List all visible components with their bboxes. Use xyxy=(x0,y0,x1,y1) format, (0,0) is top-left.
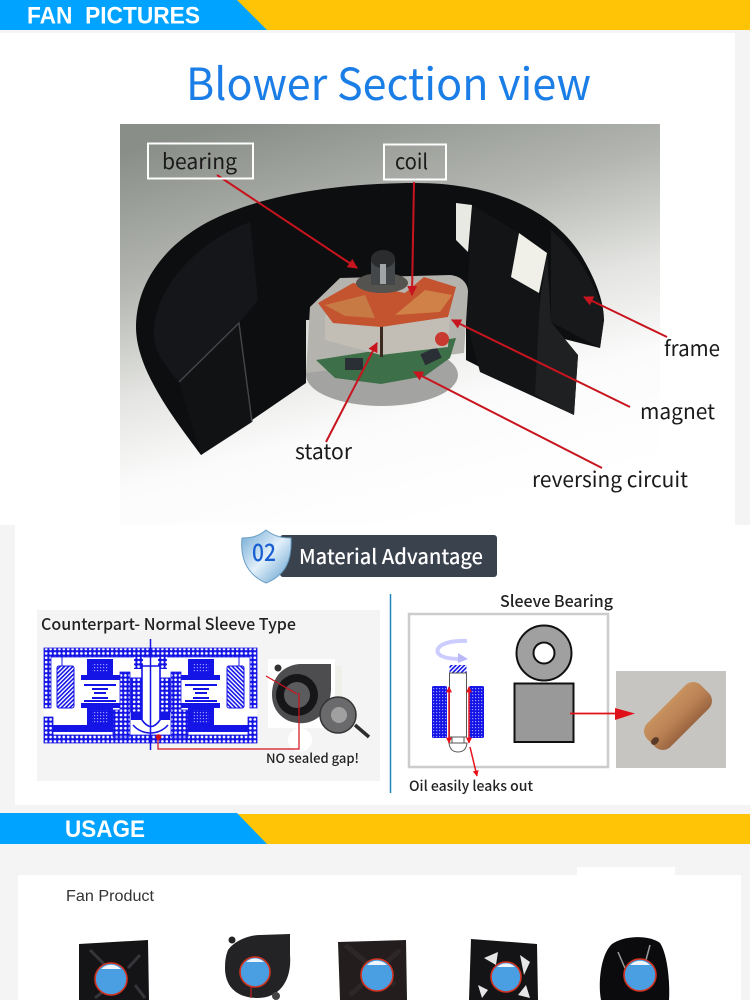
header band: fan pictures: FAN PICTURES xyxy=(27,2,200,30)
title: Blower Section view xyxy=(186,49,591,113)
product: blower xyxy=(225,934,290,1000)
oil arrows xyxy=(449,687,477,776)
schematic: blue cross-section xyxy=(44,639,257,750)
fan frame xyxy=(136,183,604,455)
label: coil: coil xyxy=(395,146,428,176)
label: bearing xyxy=(148,144,253,178)
icon: shield xyxy=(242,530,291,583)
header band: usage xyxy=(0,813,750,844)
panel: fan product xyxy=(18,867,741,1000)
divider xyxy=(390,594,392,793)
heading: Sleeve Bearing xyxy=(500,588,613,612)
shaft xyxy=(449,665,467,752)
heading: Fan Product xyxy=(66,888,155,905)
header band: fan pictures xyxy=(0,0,750,30)
arrow to photo xyxy=(570,708,635,720)
heading: Counterpart- Normal Sleeve Type xyxy=(41,611,296,635)
panel: material advantage xyxy=(15,525,750,805)
label: bearing: bearing xyxy=(162,146,237,176)
label: frame: frame xyxy=(664,333,720,363)
bearing blocks xyxy=(432,686,447,738)
callout text: NO sealed gap! xyxy=(266,748,359,767)
caption: Oil easily leaks out xyxy=(409,776,533,796)
header band: usage: USAGE xyxy=(65,816,145,843)
red pointer arrows xyxy=(217,175,667,468)
label: magnet: magnet xyxy=(640,396,715,426)
badge heading xyxy=(242,530,497,583)
label: coil xyxy=(384,144,446,180)
label: reversing circuit: reversing circuit xyxy=(532,464,688,494)
motor hub xyxy=(306,250,468,406)
panel: blower section view xyxy=(0,33,735,525)
product: round fan xyxy=(600,937,669,1000)
photo: copper sleeve xyxy=(616,671,726,768)
diagram box xyxy=(409,614,608,776)
product: square fan 2 xyxy=(469,939,538,1000)
panel: counterpart normal sleeve type xyxy=(37,610,380,781)
red callout leader xyxy=(156,676,299,749)
product: heatsink fan xyxy=(338,940,407,1000)
product: square fan 1 xyxy=(79,940,149,1000)
bearing sleeve xyxy=(514,684,574,742)
panel: sleeve bearing xyxy=(409,588,726,796)
icon: rotation arrow xyxy=(437,641,467,659)
photo: cutaway blower xyxy=(120,124,735,525)
label: stator: stator xyxy=(295,436,353,466)
fan photo with magnifier xyxy=(268,659,369,752)
badge heading: Material Advantage xyxy=(299,540,483,570)
badge heading: 02 xyxy=(252,533,276,568)
bearing ring xyxy=(516,626,572,680)
